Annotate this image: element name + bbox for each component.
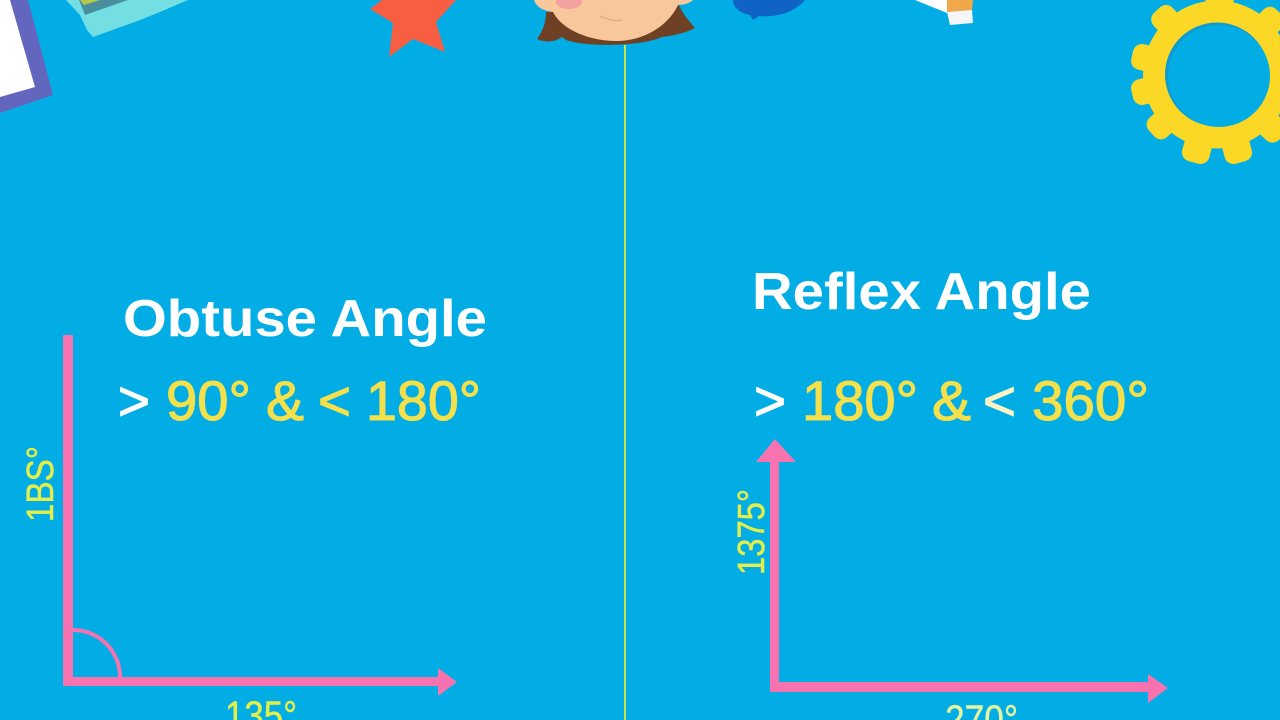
vertical label: obtuse: 1BS° xyxy=(20,446,62,522)
range text: reflex: & xyxy=(932,369,971,432)
icon: yellow gear xyxy=(1129,0,1280,166)
icon: blue shape xyxy=(733,0,805,20)
range text: obtuse: 180° xyxy=(366,369,481,432)
range text: reflex: < xyxy=(983,369,1016,432)
icon: teal book xyxy=(66,0,188,37)
range text: obtuse: < xyxy=(318,369,351,432)
range text: obtuse: > xyxy=(118,369,150,432)
center divider line xyxy=(624,45,626,720)
icon: framed white paper xyxy=(0,0,53,113)
range text: obtuse xyxy=(118,369,481,432)
icon: child face xyxy=(534,0,695,45)
range text: reflex xyxy=(754,369,1149,432)
heading: obtuse angle: Obtuse Angle xyxy=(123,290,487,348)
vertical label: reflex: 1375° xyxy=(731,489,773,575)
range text: reflex: 180° xyxy=(802,369,918,432)
range text: obtuse: 90° xyxy=(166,369,251,432)
angle diagram: obtuse xyxy=(63,335,457,696)
range text: reflex: > xyxy=(754,369,786,432)
heading: reflex angle: Reflex Angle xyxy=(752,263,1091,321)
panel: reflex angle xyxy=(731,263,1168,720)
icon: glue bottle xyxy=(915,0,973,25)
icon: red star xyxy=(370,0,456,57)
panel: obtuse angle xyxy=(20,290,487,720)
angle diagram: reflex xyxy=(756,439,1168,703)
range text: reflex: 360° xyxy=(1032,369,1149,432)
range text: obtuse: & xyxy=(266,369,304,432)
